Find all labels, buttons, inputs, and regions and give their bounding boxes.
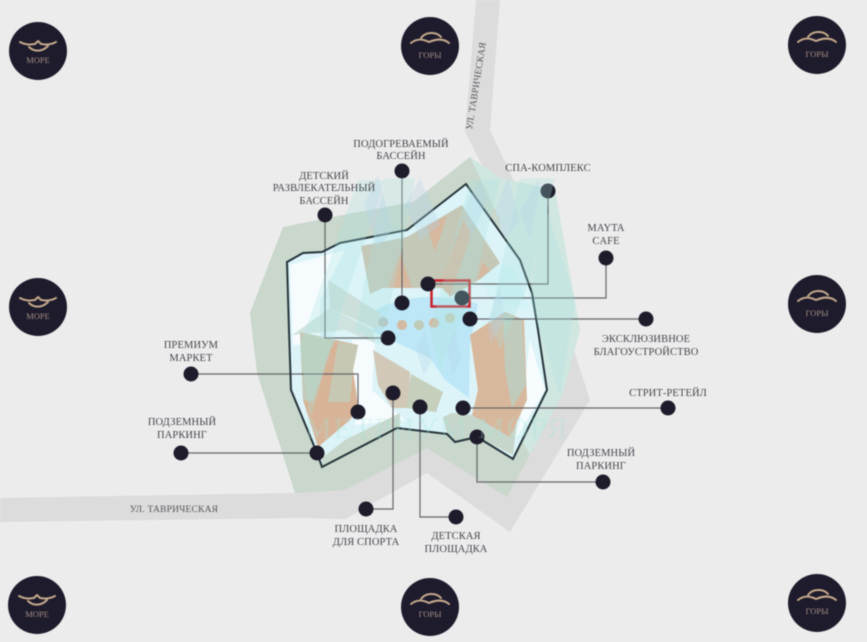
building block: north orange accents (388, 216, 490, 296)
badge: sea top left: МОРЕ (26, 55, 50, 65)
label: sports ground: ДЛЯ СПОРТА (333, 537, 400, 548)
badge: mountains middle right (788, 275, 846, 333)
building block: centre-right (406, 374, 443, 412)
label: landscaping: БЛАГОУСТРОЙСТВО (594, 346, 699, 358)
labels (148, 138, 707, 555)
building block: west green inset (300, 332, 336, 402)
building block: west green inset right (328, 342, 358, 402)
badge: sea bottom left (8, 576, 66, 634)
leader lines (181, 171, 668, 517)
landscaped grounds (250, 157, 580, 497)
label: premium market: ПРЕМИУМ (164, 340, 219, 351)
label: underground parking left: ПАРКИНГ (157, 430, 207, 441)
building block: east green (503, 312, 526, 408)
label: bottom street name: УЛ. ТАВРИЧЕСКАЯ (130, 505, 219, 515)
faint watermark: МЕТРИУМ МОРЯ (305, 412, 569, 445)
label: sports ground: ПЛОЩАДКА (334, 524, 398, 535)
label: kids pool: РАЗВЛЕКАТЕЛЬНЫЙ (273, 182, 376, 194)
building block: centre-left (373, 350, 410, 408)
water features (373, 250, 530, 398)
building block: east (470, 312, 527, 437)
label: cafe: CAFE (592, 236, 620, 247)
translucent diamond overlay (300, 175, 575, 445)
badge: sea middle left (9, 278, 67, 336)
badge: mountains bottom right (788, 574, 846, 632)
label: heated pool: БАССЕЙН (376, 150, 426, 162)
label: underground parking right: ПОДЗЕМНЫЙ (567, 447, 635, 459)
badge: mountains top centre (401, 17, 459, 75)
label: playground: ПЛОЩАДКА (424, 544, 488, 555)
badge: sea top left (9, 22, 67, 80)
badge: mountains top right (788, 16, 846, 74)
building block: north-west strip (328, 280, 380, 330)
label: cafe: MAYTA (587, 223, 625, 234)
building block: north-west strip lower (292, 308, 375, 343)
pool stepping circles (378, 313, 455, 330)
lawn: south-west (322, 413, 400, 467)
badge: sea bottom left: МОРЕ (25, 609, 49, 619)
label: playground: ДЕТСКАЯ (431, 531, 481, 542)
label: underground parking right: ПАРКИНГ (576, 461, 626, 472)
badge: mountains bottom centre: ГОРЫ (419, 609, 442, 619)
label: landscaping: ЭКСКЛЮЗИВНОЕ (602, 334, 690, 345)
road: top and bottom street (0, 0, 590, 532)
badge: sea middle left: МОРЕ (26, 311, 50, 321)
badge: mountains bottom right: ГОРЫ (806, 606, 829, 616)
label: heated pool: ПОДОГРЕВАЕМЫЙ (353, 138, 449, 150)
site boundary (287, 184, 547, 467)
site interior (287, 184, 547, 467)
label: top street name: УЛ. ТАВРИЧЕСКАЯ (465, 41, 489, 130)
building block: north (361, 205, 500, 297)
label: premium market: МАРКЕТ (169, 353, 213, 364)
badge: mountains top right: ГОРЫ (806, 49, 829, 59)
badge: mountains top centre: ГОРЫ (419, 50, 442, 60)
highlight: red frame (432, 280, 470, 306)
badge: mountains bottom centre (401, 578, 459, 636)
label: kids pool: БАССЕЙН (299, 195, 349, 207)
label: street retail: СТРИТ-РЕТЕЙЛ (629, 387, 707, 399)
markers (174, 164, 676, 524)
label: underground parking left: ПОДЗЕМНЫЙ (148, 416, 216, 428)
badge: mountains middle right: ГОРЫ (806, 308, 829, 318)
label: kids pool: ДЕТСКИЙ (299, 170, 349, 182)
building block: west (300, 332, 358, 447)
label: spa: СПА-КОМПЛЕКС (505, 163, 591, 174)
lawn: south-east (443, 413, 517, 455)
white paths (290, 250, 545, 440)
